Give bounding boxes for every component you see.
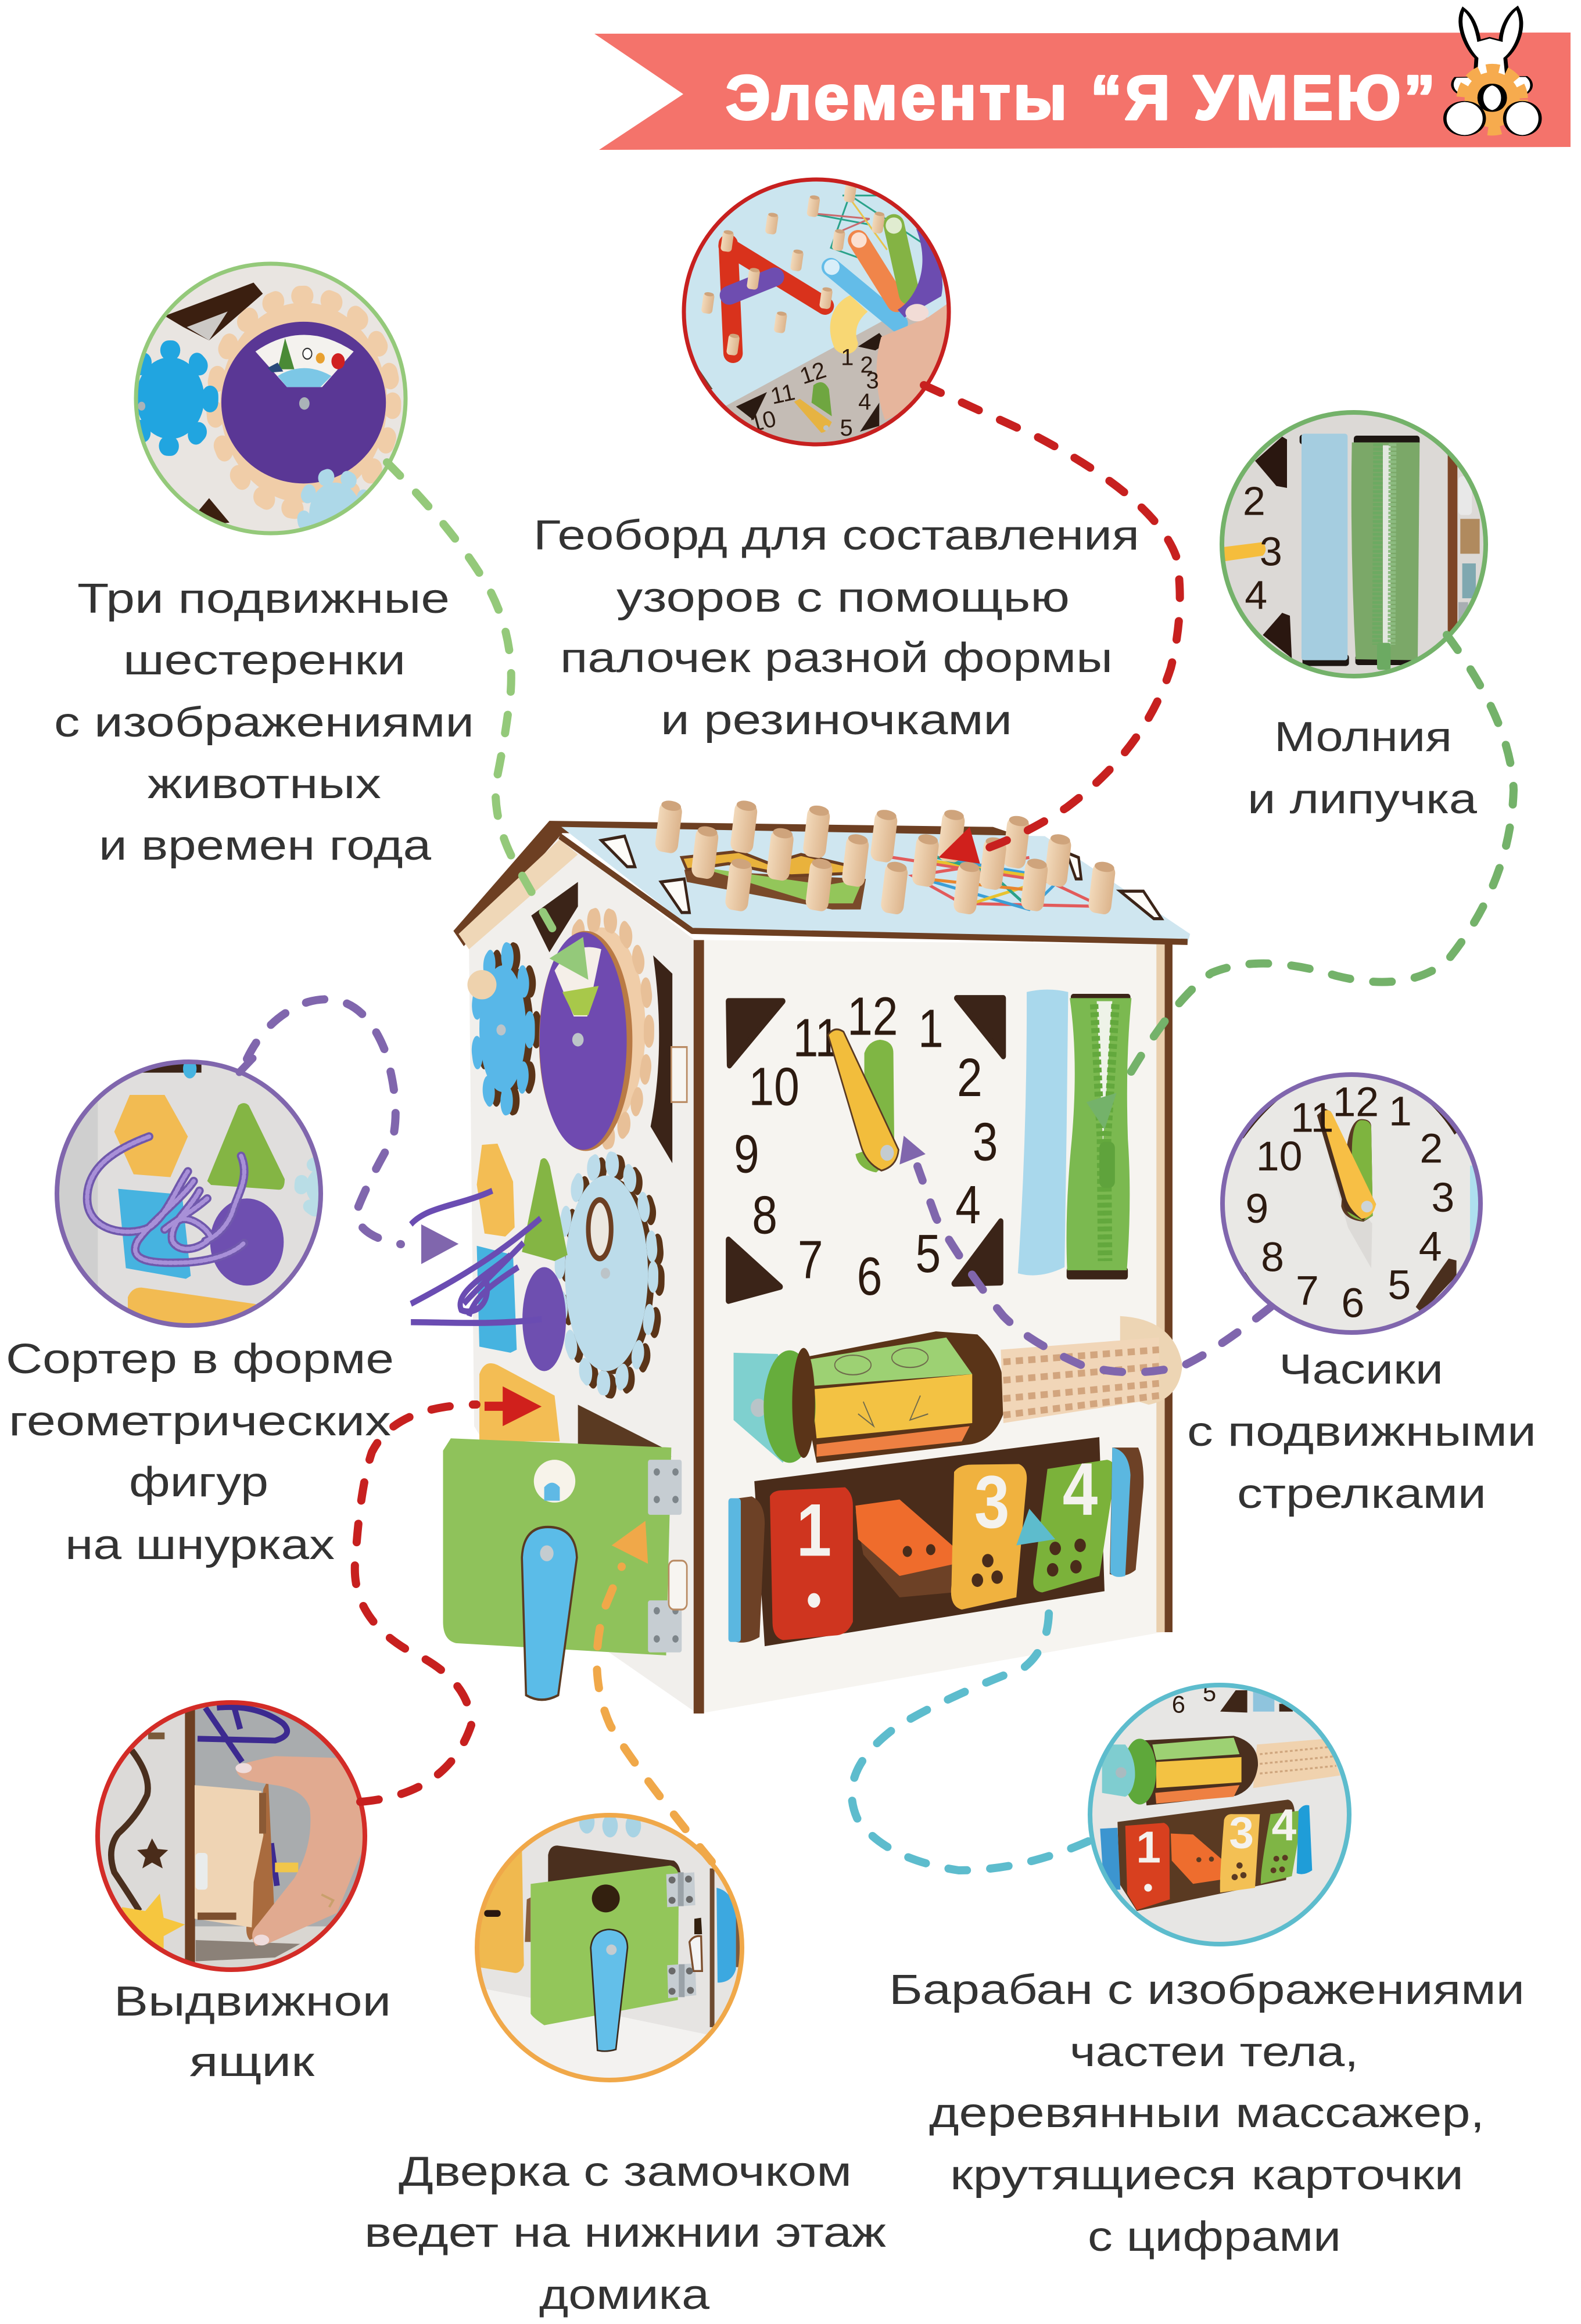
text: sorter: [6, 1336, 394, 1568]
arrow: clock: [899, 1136, 926, 1165]
photo circle: drum and number cards: 1: [1136, 1823, 1161, 1873]
text: sorter: Сортер в форме: [6, 1336, 394, 1382]
clock numerals: 8: [752, 1186, 777, 1245]
photo circle: velcro and zipper: [1220, 410, 1488, 678]
connector: sorter (purple dashed): [247, 999, 401, 1244]
clock numerals: [734, 987, 998, 1306]
toy house illustration: [411, 799, 1190, 1714]
arrow: sorter: [421, 1224, 458, 1264]
clock numerals: 6: [857, 1247, 882, 1306]
photo circle: geoboard: 3: [866, 368, 879, 393]
photo circle: clock: 11: [1290, 1094, 1334, 1141]
clock numerals: 10: [748, 1057, 800, 1117]
text: zipper and velcro: Молния: [1274, 714, 1452, 760]
photo circle: velcro and zipper: 2: [1243, 479, 1265, 524]
photo circle: clock: 6: [1341, 1280, 1364, 1326]
clock numerals: 7: [798, 1230, 823, 1290]
text: gears: [54, 576, 474, 869]
photo circle: pull-out drawer: [95, 1700, 367, 1972]
title banner: [594, 33, 1571, 150]
connector: zipper (green dashed): [1126, 635, 1514, 1080]
text: clock: Часики: [1279, 1346, 1443, 1393]
photo circle: clock: 7: [1296, 1268, 1319, 1314]
photo circle: geoboard: 2: [861, 353, 873, 378]
photo circle: geoboard: 4: [858, 389, 871, 415]
clock numerals: 12: [847, 987, 898, 1047]
connector: drum and cards (teal dashed): [852, 1591, 1088, 1870]
connector: door (orange dashed): [597, 1567, 712, 1862]
clock cut-outs: [729, 998, 1003, 1301]
text: sorter: фигур: [129, 1459, 268, 1506]
photo circle: gears: [130, 260, 413, 551]
clock numerals: 4: [955, 1175, 981, 1235]
text: clock: с подвижными: [1187, 1409, 1536, 1455]
connector: drawer (red dashed): [355, 1405, 476, 1802]
number cards: 1: [797, 1489, 831, 1572]
house front wall: [697, 940, 1170, 1714]
arrow: geoboard: [938, 827, 980, 864]
photo circle: clock: 4: [1419, 1223, 1442, 1270]
text: drum and cards: частеи тела,: [1070, 2029, 1358, 2075]
arrow: zipper: [1087, 1093, 1116, 1130]
connector: gears (green dashed): [387, 462, 557, 937]
text: geoboard: [533, 512, 1139, 743]
text: geoboard: Геоборд для составления: [533, 512, 1139, 559]
arrow: door: [612, 1521, 648, 1564]
photo circle: velcro and zipper: 3: [1260, 529, 1282, 574]
photo circle: clock: 5: [1388, 1262, 1411, 1309]
photo circle: clock: 1: [1389, 1088, 1412, 1134]
icon: rabbit with gear: [1445, 8, 1540, 135]
photo circle: drum and number cards: 4: [1272, 1801, 1297, 1850]
clock numerals: 9: [734, 1124, 759, 1184]
text: zipper and velcro: [1247, 714, 1478, 822]
photo circle: drum and number cards: 5: [1203, 1679, 1216, 1706]
connector: clock (purple dashed): [917, 1166, 1271, 1372]
text: geoboard: узоров с помощью: [616, 574, 1070, 621]
text: door: ведет на нижнии этаж: [364, 2210, 886, 2256]
text: clock: [1187, 1346, 1536, 1517]
photo circle: clock: [1220, 1072, 1483, 1335]
text: drum and cards: с цифрами: [1088, 2214, 1341, 2260]
photo circle: drum and number cards: 3: [1229, 1809, 1254, 1858]
text: zipper and velcro: и липучка: [1247, 776, 1478, 822]
clock numerals: 1: [918, 999, 944, 1059]
arrowheads on house: [421, 827, 1116, 1564]
number cards: [729, 1437, 1143, 1646]
text: gears: шестеренки: [123, 637, 406, 684]
photo circle: velcro and zipper: 4: [1245, 572, 1267, 617]
photo circle: geoboard: 11: [768, 379, 797, 410]
text: door: домика: [539, 2272, 710, 2318]
zipper: [1066, 994, 1131, 1280]
photo circle: geoboard: 1: [841, 344, 854, 370]
drum with body parts: [734, 1331, 1005, 1463]
photo circle: drum and number cards: [1088, 1683, 1351, 1946]
text: drum and cards: крутящиеся карточки: [950, 2152, 1464, 2199]
clock hands: [828, 1029, 898, 1172]
photo circle: clock: 9: [1245, 1186, 1268, 1232]
photo circle: clock: 8: [1261, 1234, 1284, 1280]
roof: [453, 821, 1190, 949]
roof pegs: [654, 799, 1116, 915]
photo circle: geoboard: 10: [747, 406, 779, 437]
photo circle: geoboard: 12: [797, 357, 829, 389]
arrow: gears: [550, 937, 589, 980]
arrow: drawer: [485, 1387, 542, 1426]
clock numerals: 5: [916, 1224, 941, 1284]
photo circle: geoboard: 5: [840, 415, 853, 441]
number cards: 4: [1063, 1447, 1098, 1531]
side door with handle: [443, 1405, 687, 1700]
clock numerals: 2: [957, 1048, 983, 1108]
photo circle: drum and number cards: 6: [1172, 1690, 1185, 1718]
text: door: [364, 2149, 886, 2318]
text: drum and cards: Барабан с изображениями: [889, 1967, 1525, 2013]
side gears: [467, 882, 687, 1387]
text: drawer: ящик: [189, 2039, 315, 2085]
house side wall: [469, 836, 697, 1714]
photo circle: clock: 12: [1332, 1079, 1379, 1126]
text: geoboard: и резиночками: [661, 697, 1012, 743]
title banner: Элементы “Я УМЕЮ”: [726, 62, 1435, 132]
photo circle: clock: 10: [1256, 1133, 1302, 1180]
photo circle: clock: 3: [1431, 1174, 1454, 1221]
text: gears: с изображениями: [54, 699, 474, 746]
connector: geoboard (red dashed): [924, 385, 1180, 852]
photo circle: clock: 2: [1419, 1126, 1443, 1172]
text: drum and cards: деревянныи массажер,: [929, 2090, 1485, 2136]
arrow: cards: [1016, 1508, 1055, 1545]
text: drum and cards: [889, 1967, 1525, 2260]
photo circle: door with lock: [475, 1813, 744, 2082]
text: geoboard: палочек разной формы: [560, 635, 1113, 681]
photo circle: shape sorter: [55, 1055, 323, 1328]
text: gears: Три подвижные: [77, 576, 450, 622]
wooden massager roller: [1001, 1316, 1182, 1423]
velcro strap: [1018, 990, 1068, 1276]
side shape sorter: [411, 1144, 568, 1442]
clock numerals: 11: [793, 1008, 840, 1068]
number cards: 3: [974, 1461, 1009, 1544]
text: door: Дверка с замочком: [399, 2149, 852, 2195]
text: sorter: на шнурках: [65, 1522, 335, 1568]
text: drawer: Выдвижнои: [114, 1978, 391, 2025]
text: gears: и времен года: [99, 822, 432, 869]
clock numerals: 3: [973, 1112, 998, 1172]
geoboard pieces on roof: [682, 852, 1102, 910]
text: gears: животных: [148, 761, 381, 807]
text: clock: стрелками: [1237, 1471, 1486, 1517]
text: sorter: геометрических: [9, 1398, 391, 1445]
text: drawer: [114, 1978, 391, 2085]
photo circle: geoboard: [682, 178, 951, 446]
